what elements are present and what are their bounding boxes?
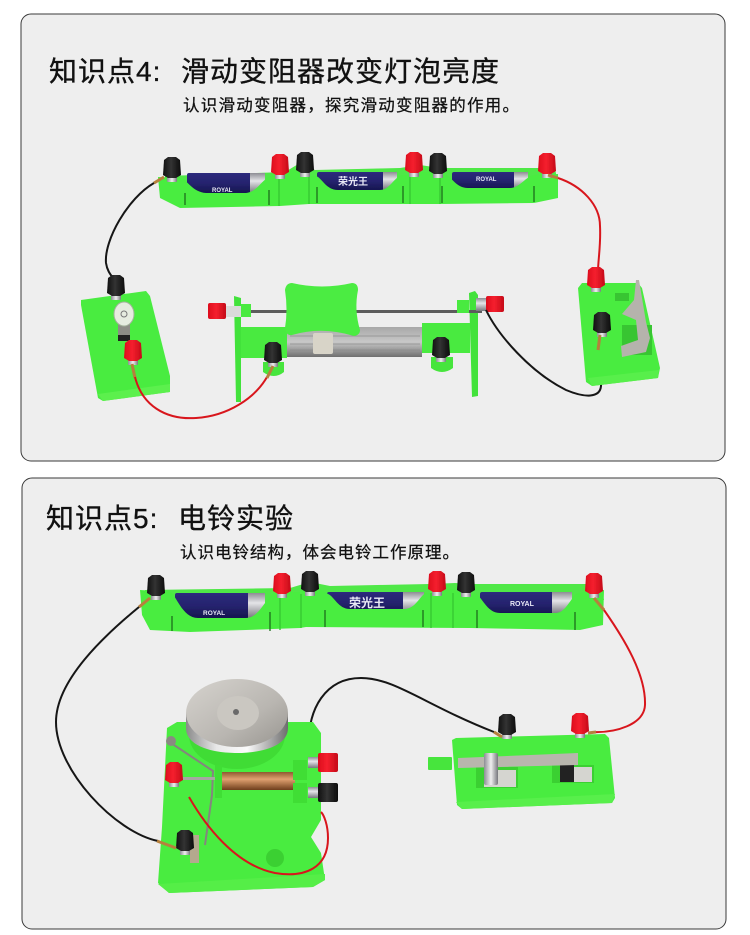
battery holder with three batteries: ROYAL <box>510 601 535 608</box>
black wire: rheostat to switch <box>486 310 601 396</box>
red wire: battery to switch <box>558 178 600 272</box>
red wire: bell internal link <box>189 797 328 874</box>
panel: knowledge point 5 <box>22 478 726 929</box>
bulb board <box>81 275 170 401</box>
red wire: bulb to rheostat <box>135 377 267 418</box>
black wire: battery to bell <box>56 607 158 841</box>
heading: knowledge point 5: 知识点5: <box>46 503 158 534</box>
heading: knowledge point 4: 知识点4: <box>49 56 161 87</box>
spring contact <box>168 741 213 845</box>
battery holder with three batteries: ROYAL <box>476 177 497 183</box>
battery terminals <box>154 152 558 183</box>
photo: rheostat circuit <box>81 152 660 418</box>
rheostat <box>208 283 504 402</box>
bell dome <box>186 679 288 753</box>
battery holder with three batteries <box>158 163 558 208</box>
coil <box>215 760 307 803</box>
photo: electric bell circuit <box>56 571 645 893</box>
black wire: bell to switch <box>309 678 494 743</box>
battery terminals <box>139 571 604 610</box>
knife switch <box>428 713 615 809</box>
battery holder with three batteries: ROYAL <box>212 188 233 194</box>
battery holder with three batteries: ROYAL <box>203 610 225 617</box>
knife switch <box>578 267 660 386</box>
red wire: battery to switch <box>592 610 645 732</box>
text: knowledge point 5 description: 认识电铃结构，体会电铃工作原理。 <box>180 543 460 562</box>
black wire: battery to bulb <box>106 183 154 278</box>
bell terminals <box>157 753 338 863</box>
heading: knowledge point 4: 滑动变阻器改变灯泡亮度 <box>181 56 500 87</box>
heading: knowledge point 5: 电铃实验 <box>178 503 294 534</box>
battery holder with three batteries: 荣光王 <box>338 175 368 188</box>
panel: knowledge point 4 <box>21 14 725 461</box>
text: knowledge point 4 description: 认识滑动变阻器，探究滑动变阻器的作用。 <box>183 96 520 115</box>
battery holder with three batteries <box>140 582 604 632</box>
battery holder with three batteries: 荣光王 <box>349 595 385 610</box>
electric bell <box>157 679 338 893</box>
